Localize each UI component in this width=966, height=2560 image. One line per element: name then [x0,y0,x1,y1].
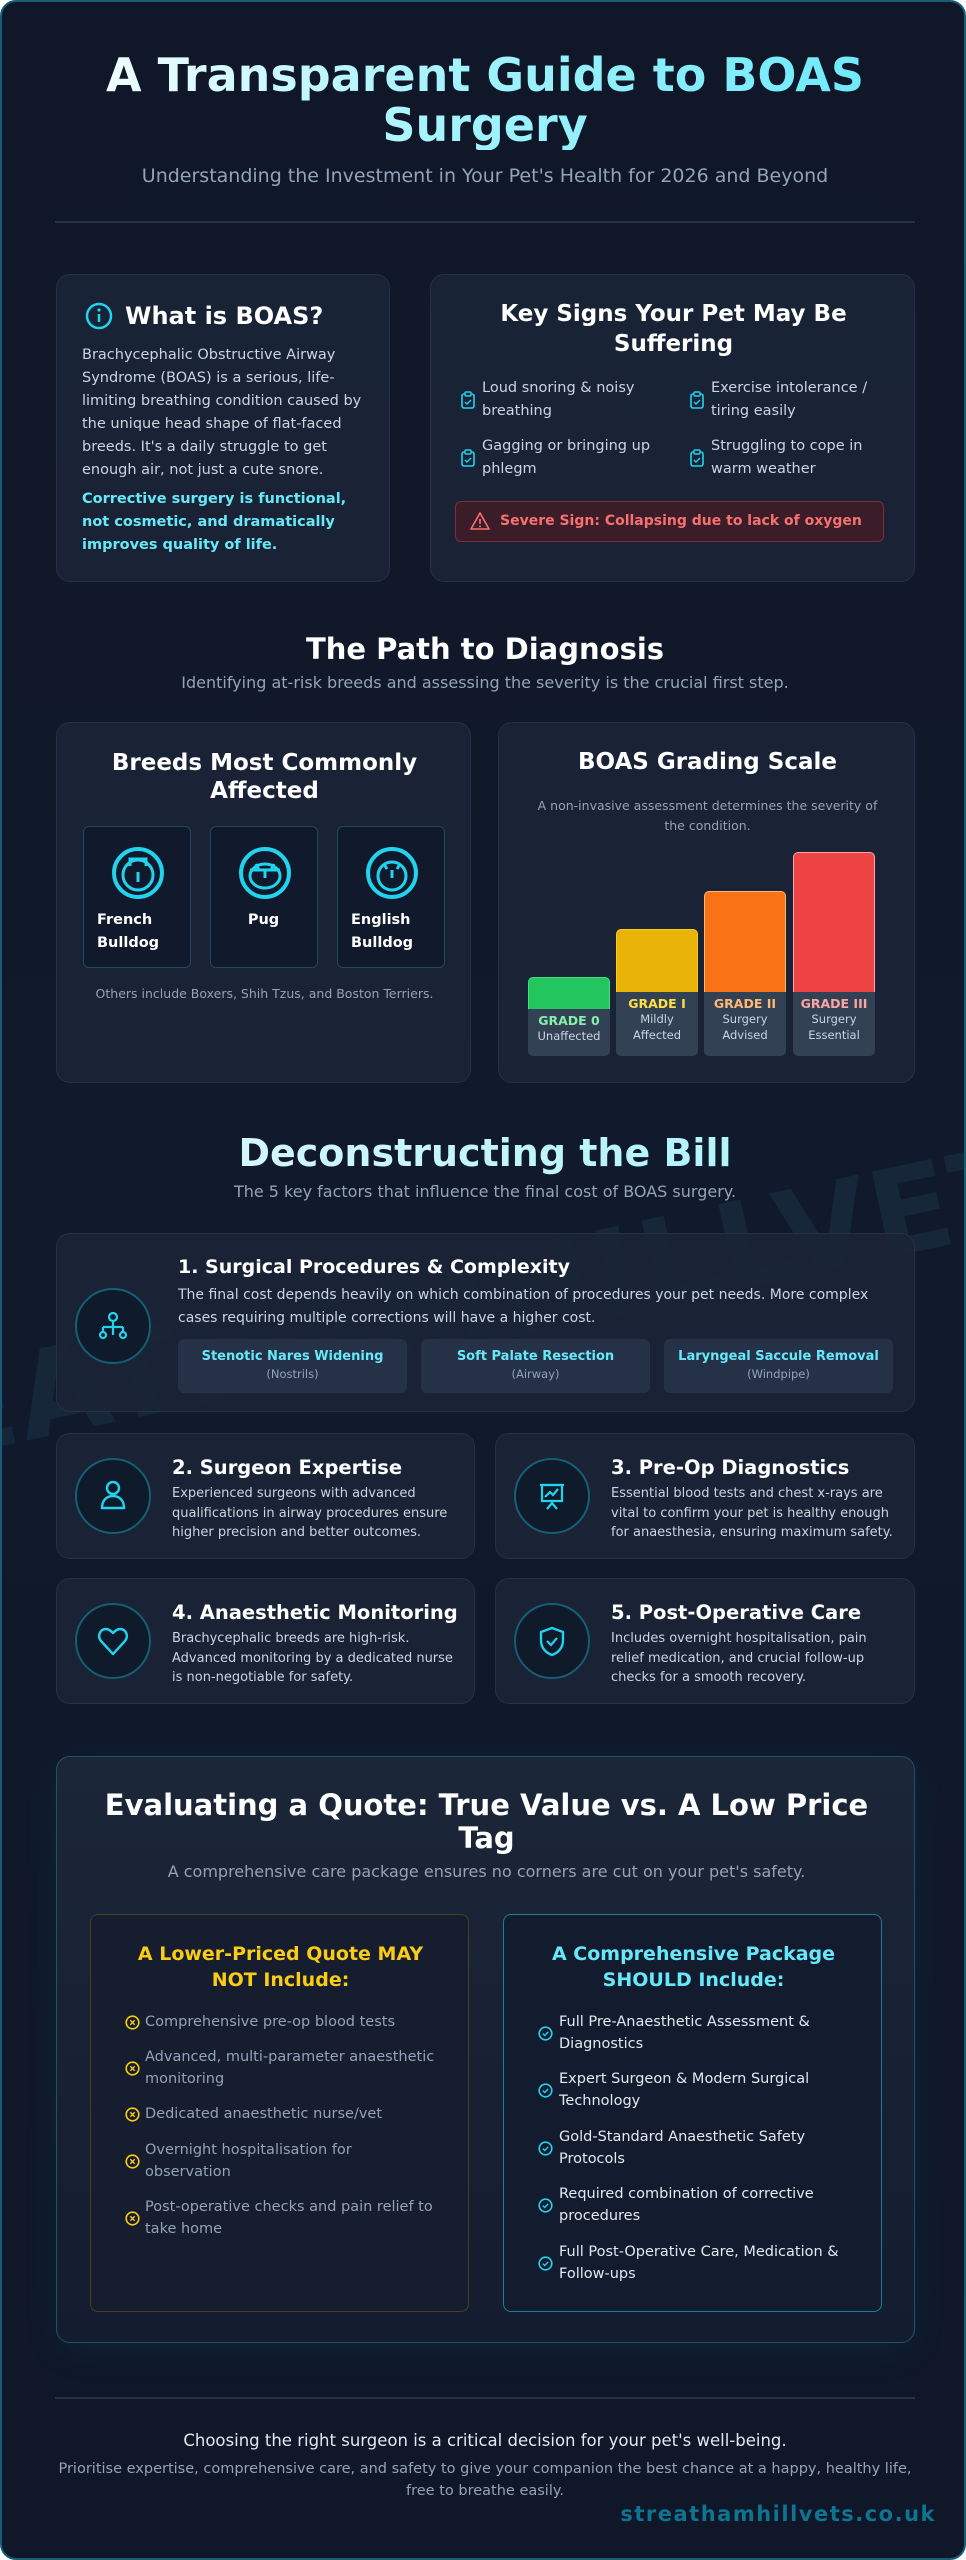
card: 2 surgeon expertise [56,1433,475,1559]
highlight text: Corrective surgery is functional, not cosmetic, and dramatically improves quality of life. [82,491,346,553]
bar chart [528,852,875,1056]
panel: evaluating a quote [56,1756,915,2343]
severe sign callout: Severe Sign: Collapsing due to lack of oxygen [500,513,862,529]
bar: grade I: GRADE I [628,996,686,1011]
body: The final cost depends heavily on which combination of procedures your pet needs. More complex cases requiring multiple corrections will have a higher cost. [178,1287,868,1326]
footer: website: streathamhillvets.co.uk [620,2502,936,2526]
item: Gold-Standard Anaesthetic Safety Protocols [559,2129,805,2167]
signs list [461,380,868,477]
subtitle: Understanding the Investment in Your Pet's Health for 2026 and Beyond [142,165,828,187]
item: Dedicated anaesthetic nurse/vet [145,2106,382,2122]
heading: BOAS Grading Scale [578,749,837,775]
bar: grade I: Mildly [640,1012,674,1026]
breed: english bulldog [337,826,445,968]
item: Post-operative checks and pain relief to take home [145,2199,433,2237]
heading: A Comprehensive Package SHOULD Include: [552,1943,835,1991]
title: 1. Surgical Procedures & Complexity [178,1256,570,1278]
sign 1: Loud snoring & noisy breathing [482,380,634,419]
body: Experienced surgeons with advanced qualifications in airway procedures ensure higher precision and better outcomes. [172,1486,447,1540]
heading: What is BOAS? [125,302,323,330]
body: Brachycephalic breeds are high-risk. Advanced monitoring by a dedicated nurse is non-negotiable for safety. [172,1631,453,1685]
item: Expert Surgeon & Modern Surgical Technology [559,2071,809,2109]
card: 4 anaesthetic monitoring [56,1578,475,1704]
panel: grading scale [498,722,915,1083]
breed: french bulldog [83,826,191,968]
footer: closing statement: Choosing the right surgeon is a critical decision for your pet's well-being. [183,2431,787,2450]
panel: key signs [430,274,915,582]
body text: Brachycephalic Obstructive Airway Syndrome (BOAS) is a serious, life-limiting breathing condition caused by the unique head shape of flat-faced breeds. It's a daily struggle to get enough air, not just a cute snore. [82,347,361,478]
pill: soft palate [421,1339,650,1393]
pill: stenotic nares [178,1339,407,1393]
pill: stenotic nares: (Nostrils) [266,1367,319,1381]
box: lower priced quote [90,1914,469,2312]
item: Overnight hospitalisation for observation [145,2142,352,2180]
bar: grade I [616,929,698,1056]
bar: grade III: Essential [808,1028,860,1042]
sign 2: Exercise intolerance / tiring easily [711,380,867,419]
breed: english bulldog: English [351,912,411,928]
icon: chart board [514,1458,590,1534]
title: 4. Anaesthetic Monitoring [172,1601,458,1624]
heading: Breeds Most Commonly Affected [112,750,417,804]
body: Essential blood tests and chest x-rays are vital to confirm your pet is healthy enough for anaesthesia, ensuring maximum safety. [611,1486,893,1540]
panel: what is BOAS [56,274,390,582]
sign 4: Struggling to cope in warm weather [711,438,862,477]
footer: advice: Prioritise expertise, comprehensive care, and safety to give your companion the best chance at a happy, healthy life, free to breathe easily. [58,2461,912,2499]
icon: info [86,302,112,330]
bar: grade I: Affected [633,1028,681,1042]
bar: grade 0 [528,977,610,1056]
item: Full Pre-Anaesthetic Assessment & Diagnostics [559,2014,810,2052]
bar: grade II [704,891,786,1056]
heading: path to diagnosis: The Path to Diagnosis [306,632,664,666]
title: 5. Post-Operative Care [611,1601,861,1624]
breed: french bulldog: French [97,912,152,928]
item: Advanced, multi-parameter anaesthetic monitoring [145,2049,434,2087]
list: excluded items [125,2014,434,2237]
bar: grade III: GRADE III [801,996,867,1011]
pill: laryngeal saccule: Laryngeal Saccule Removal [678,1349,879,1364]
list: included items [538,2014,839,2282]
pill: laryngeal saccule: (Windpipe) [747,1367,810,1381]
pill: stenotic nares: Stenotic Nares Widening [202,1349,383,1364]
subheading: Identifying at-risk breeds and assessing the severity is the crucial first step. [181,673,789,692]
panel: breeds [56,722,471,1083]
bar: grade III: Surgery [811,1012,857,1026]
pill: soft palate: Soft Palate Resection [457,1349,614,1364]
heading: deconstructing the bill: Deconstructing the Bill [238,1131,732,1175]
title: 3. Pre-Op Diagnostics [611,1456,849,1479]
heading: Evaluating a Quote: True Value vs. A Low Price Tag [105,1788,868,1855]
body: Includes overnight hospitalisation, pain relief medication, and crucial follow-up checks for a smooth recovery. [611,1631,867,1685]
sign 3: Gagging or bringing up phlegm [482,438,650,477]
box: comprehensive package [503,1914,882,2312]
bar: grade II: Advised [722,1028,768,1042]
card: 1 surgical procedures [56,1233,915,1412]
bar: grade III [793,852,875,1056]
card: 5 post-operative care [495,1578,915,1704]
heading: A Lower-Priced Quote MAY NOT Include: [138,1943,423,1991]
description: A non-invasive assessment determines the severity of the condition. [538,798,877,833]
heading: deconstructing the bill [42,1131,928,1175]
heading: Key Signs Your Pet May Be Suffering [500,301,847,357]
bar: grade II: Surgery [722,1012,768,1026]
note: Others include Boxers, Shih Tzus, and Boston Terriers. [96,986,433,1001]
pill: laryngeal saccule [664,1339,893,1393]
title: A Transparent Guide to BOAS Surgery [106,48,864,152]
breed: french bulldog: Bulldog [97,935,159,951]
card: 3 pre-op diagnostics [495,1433,915,1559]
breed: pug [210,826,318,968]
icon: heart [75,1603,151,1679]
severe sign callout [455,501,884,542]
pill: soft palate: (Airway) [511,1367,560,1381]
icon: person [75,1458,151,1534]
breed: english bulldog: Bulldog [351,935,413,951]
icon: shield check [514,1603,590,1679]
icon: procedures [75,1288,151,1364]
title: 2. Surgeon Expertise [172,1456,402,1479]
subheading: The 5 key factors that influence the final cost of BOAS surgery. [234,1182,736,1201]
subheading: A comprehensive care package ensures no corners are cut on your pet's safety. [168,1862,805,1881]
item: Full Post-Operative Care, Medication & Follow-ups [559,2244,839,2282]
bar: grade II: GRADE II [714,996,776,1011]
breed: pug: Pug [248,912,279,928]
item: Required combination of corrective procedures [559,2186,814,2224]
bar: grade 0: GRADE 0 [538,1013,600,1028]
item: Comprehensive pre-op blood tests [145,2014,395,2030]
bar: grade 0: Unaffected [538,1029,600,1043]
